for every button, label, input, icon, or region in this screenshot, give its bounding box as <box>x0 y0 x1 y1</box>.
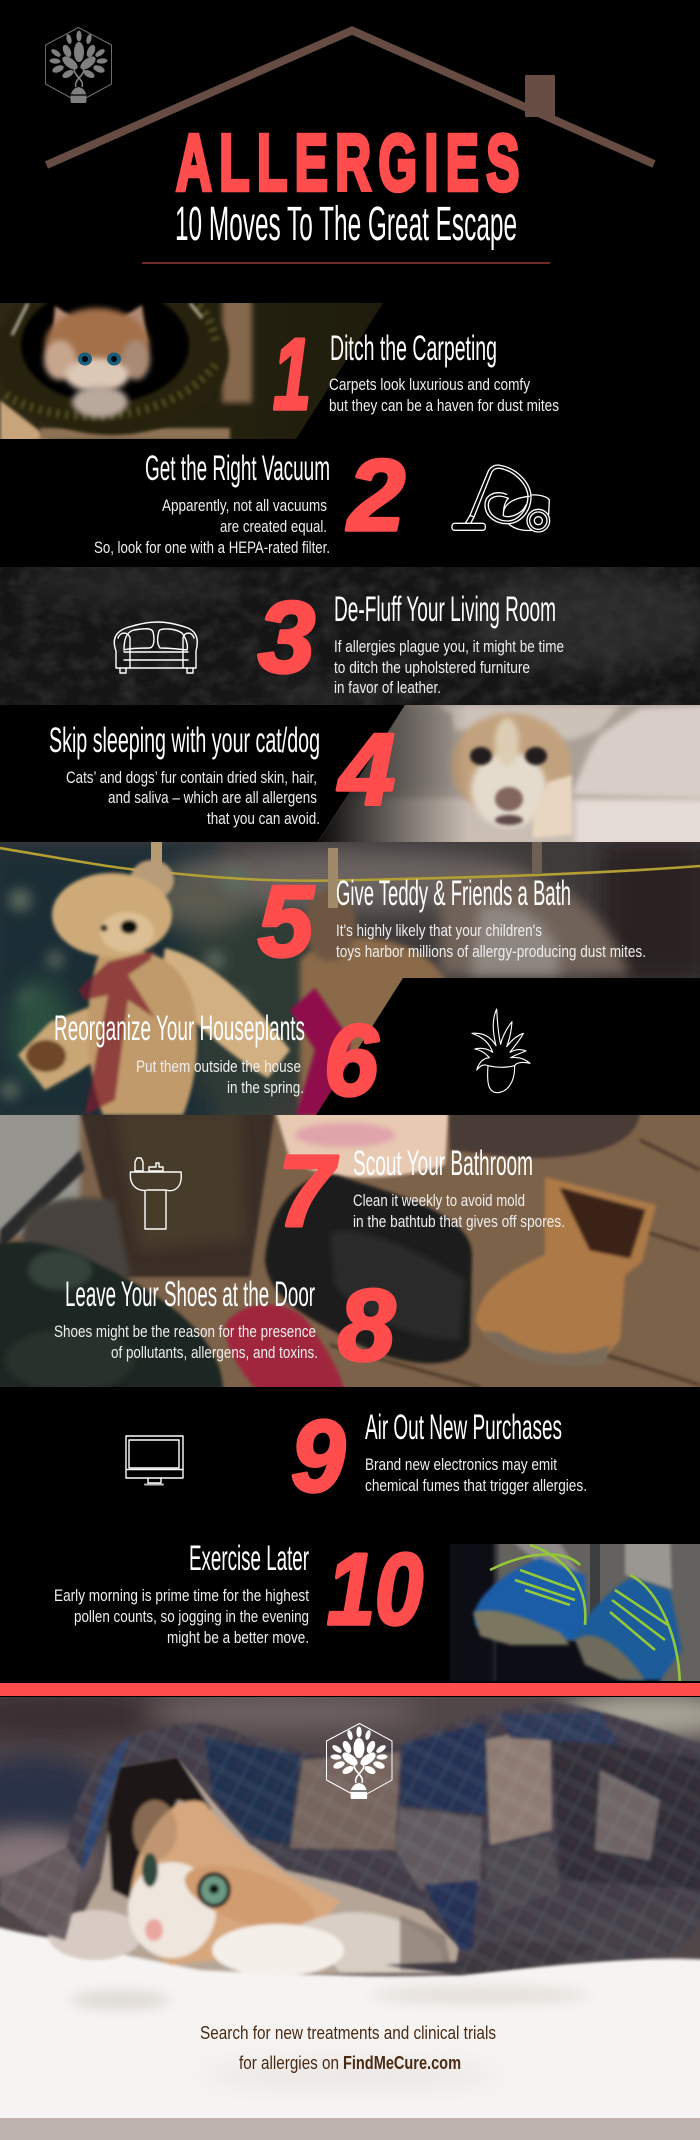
call to action text <box>200 2023 496 2073</box>
heading: Get the Right Vacuum <box>145 449 330 488</box>
body text: pollen counts, so jogging in the evening <box>74 1607 309 1626</box>
call to action text: for allergies on <box>239 2053 339 2073</box>
body text <box>54 1586 309 1647</box>
number 7: 7 <box>278 1136 339 1248</box>
body text: step 7 <box>353 1191 565 1231</box>
heading: Ditch the Carpeting <box>330 329 497 368</box>
body text: are created equal. <box>220 517 327 536</box>
number 1: 1 <box>273 319 311 431</box>
title: ALLERGIES <box>176 119 527 208</box>
divider line <box>142 262 550 264</box>
body text: Brand new electronics may emit <box>365 1455 557 1474</box>
body text: might be a better move. <box>167 1628 309 1647</box>
panel: steps 7 and 8 shoes <box>0 1110 700 1395</box>
panel: step 3 living room <box>0 563 700 709</box>
body text <box>329 375 559 415</box>
icon: computer monitor <box>126 1436 183 1484</box>
heading: step 8: Leave Your Shoes at the Door <box>65 1275 315 1314</box>
number 8: 8 <box>338 1270 396 1382</box>
body text: step 7: in the bathtub that gives off spores. <box>353 1212 565 1231</box>
panel: step 2 vacuum <box>94 440 550 557</box>
body text: step 8: Shoes might be the reason for the presence <box>54 1322 316 1341</box>
kitten <box>48 1757 460 1976</box>
body text: step 8 <box>54 1322 318 1362</box>
panel: step 10 exercise <box>55 1544 700 1681</box>
body text: step 5: It's highly likely that your children's <box>336 921 542 940</box>
heading: Exercise Later <box>189 1539 309 1578</box>
photo: kitten in carpet tube <box>0 303 383 439</box>
body text: step 6: in the spring. <box>227 1078 304 1097</box>
icon: houseplant <box>472 1009 530 1093</box>
bottom band <box>0 2118 700 2140</box>
roof with chimney <box>46 30 654 165</box>
icon: bathroom sink <box>130 1158 181 1229</box>
number 10: 10 <box>327 1534 423 1646</box>
body text <box>334 637 564 697</box>
photo: sneakers on tyre swing <box>450 1544 700 1681</box>
body text: If allergies plague you, it might be time <box>334 637 564 656</box>
photo: teddy bears on washing line <box>0 842 700 1132</box>
body text: So, look for one with a HEPA-rated filter. <box>94 538 330 557</box>
body text: step 8: of pollutants, allergens, and toxins. <box>111 1343 318 1362</box>
body text: step 5 <box>336 921 646 961</box>
number 2: 2 <box>346 440 405 552</box>
photo: dog under blanket <box>300 705 700 846</box>
body text: Cats’ and dogs’ fur contain dried skin, hair, <box>66 768 317 787</box>
heading: Skip sleeping with your cat/dog <box>49 721 320 760</box>
blanket <box>0 1702 700 1975</box>
number 4: 4 <box>337 714 395 826</box>
body text: step 6: Put them outside the house <box>136 1057 301 1076</box>
call to action text: Search for new treatments and clinical trials <box>200 2023 496 2043</box>
panel: steps 5 and 6 teddy bears <box>0 842 700 1132</box>
icon: sofa <box>114 622 197 673</box>
panel: step 4 cat and dog <box>49 705 700 846</box>
panel: footer kitten under blanket <box>0 1689 700 2125</box>
heading: step 7: Scout Your Bathroom <box>353 1144 533 1183</box>
body text: Apparently, not all vacuums <box>162 496 327 515</box>
number 3: 3 <box>258 582 315 694</box>
number 5: 5 <box>258 866 315 978</box>
number 6: 6 <box>324 1005 379 1117</box>
number 9: 9 <box>291 1401 345 1513</box>
call to action text: FindMeCure.com <box>343 2053 461 2073</box>
body text: step 7: Clean it weekly to avoid mold <box>353 1191 525 1210</box>
icon: logo hexagon tree (white) <box>326 1724 392 1799</box>
body text <box>66 768 320 828</box>
bed sheet <box>0 1925 700 2125</box>
body text: and saliva – which are all allergens <box>108 788 317 807</box>
body text <box>94 496 330 557</box>
body text: but they can be a haven for dust mites <box>329 396 559 415</box>
body text <box>365 1455 587 1495</box>
body text: chemical fumes that trigger allergies. <box>365 1476 587 1495</box>
photo: dark upholstery texture <box>0 563 700 709</box>
red divider bar <box>0 1683 700 1696</box>
body text: that you can avoid. <box>207 809 320 828</box>
panel: header <box>46 28 654 264</box>
black panel: step 6 <box>316 978 700 1115</box>
body text: Early morning is prime time for the highest <box>54 1586 309 1605</box>
panel: step 9 purchases <box>126 1401 587 1513</box>
second and third bears <box>300 938 450 1115</box>
icon: logo hexagon tree (grey) <box>46 28 112 103</box>
body text: in favor of leather. <box>334 678 441 697</box>
body text: to ditch the upholstered furniture <box>334 658 530 677</box>
icon: vacuum cleaner <box>452 465 550 532</box>
photo: kitten under plaid blanket <box>0 1689 700 2125</box>
photo: shoes on wooden deck <box>0 1110 700 1395</box>
body text: step 6 <box>136 1057 304 1097</box>
body text: Carpets look luxurious and comfy <box>329 375 530 394</box>
panel: step 1 carpeting <box>0 303 559 439</box>
heading: step 6: Reorganize Your Houseplants <box>54 1009 305 1048</box>
teddy bear <box>18 860 290 1115</box>
